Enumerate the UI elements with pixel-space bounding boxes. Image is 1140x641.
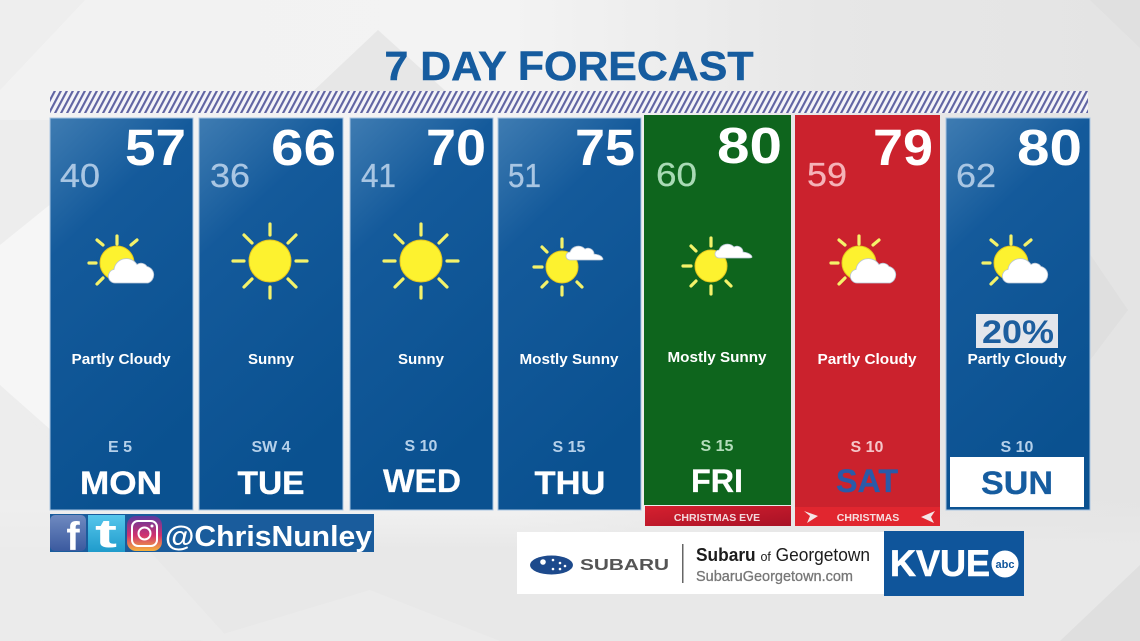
social handle bar — [50, 512, 374, 559]
high temperature Wednesday: 70 — [426, 119, 486, 176]
wind Thursday: S 15 — [553, 439, 586, 456]
high temperature Sunday: 80 — [1017, 119, 1082, 176]
wind Sunday: S 10 — [1001, 439, 1034, 456]
wind Monday: E 5 — [108, 439, 132, 456]
panel: Wednesday — [350, 118, 493, 510]
low temperature Sunday: 62 — [956, 157, 996, 194]
panel: Friday — [644, 115, 791, 526]
panel: Monday — [50, 118, 193, 510]
dealer name: Subaru of Georgetown — [696, 545, 870, 565]
icon: facebook: f — [66, 515, 80, 559]
day Thursday: THU — [534, 465, 606, 501]
KVUE logo — [884, 531, 1024, 596]
precipitation chance: 20% — [982, 314, 1054, 350]
condition Thursday: Mostly Sunny — [520, 352, 618, 368]
day label Sunday — [950, 457, 1084, 507]
high temperature Friday: 80 — [717, 117, 782, 174]
hatched band — [50, 91, 1088, 113]
low temperature Monday: 40 — [60, 157, 100, 194]
KVUE logo: KVUE — [890, 543, 990, 584]
sponsor panel — [517, 532, 885, 594]
banner: Christmas Eve — [645, 506, 791, 526]
icon: Subaru logo — [530, 556, 573, 574]
wind Saturday: S 10 — [851, 439, 884, 456]
icon: right ribbon — [921, 511, 935, 523]
day Saturday: SAT — [836, 463, 898, 499]
high temperature Thursday: 75 — [575, 119, 635, 176]
day Friday: FRI — [691, 463, 743, 499]
wind Tuesday: SW 4 — [251, 439, 291, 456]
icon: twitter — [88, 512, 125, 556]
icon: mostly sunny Friday — [683, 238, 752, 294]
low temperature Friday: 60 — [656, 156, 697, 193]
handle text: @ChrisNunley — [165, 521, 372, 553]
condition Friday: Mostly Sunny — [668, 350, 766, 366]
condition Tuesday: Sunny — [248, 352, 294, 368]
Subaru wordmark: SUBARU — [580, 557, 669, 574]
icon: partly cloudy Sunday — [983, 236, 1048, 284]
divider in sponsor panel — [682, 544, 684, 583]
dealer website: SubaruGeorgetown.com — [696, 569, 853, 585]
banner: Christmas Eve: CHRISTMAS EVE — [674, 512, 760, 524]
panel: Thursday — [498, 118, 641, 510]
icon: sun Wednesday — [384, 224, 458, 298]
panel: Saturday — [795, 115, 940, 526]
panel: Tuesday — [199, 118, 343, 510]
icon: abc circle: abc — [996, 559, 1014, 571]
day Tuesday: TUE — [238, 465, 304, 501]
banner: Christmas — [795, 507, 940, 526]
icon: mostly sunny Thursday — [534, 239, 603, 295]
day Wednesday: WED — [383, 463, 461, 499]
condition Monday: Partly Cloudy — [72, 352, 170, 368]
title: 7 DAY FORECAST — [384, 43, 754, 89]
icon: instagram — [127, 516, 162, 551]
condition Saturday: Partly Cloudy — [818, 352, 916, 368]
high temperature Monday: 57 — [125, 119, 186, 176]
banner: Christmas: CHRISTMAS — [837, 512, 899, 524]
icon: left ribbon — [804, 511, 818, 523]
day Monday: MON — [80, 465, 162, 501]
icon: facebook — [50, 515, 86, 559]
high temperature Tuesday: 66 — [271, 119, 336, 176]
day label Sunday: SUN — [981, 465, 1053, 501]
condition Wednesday: Sunny — [398, 352, 444, 368]
low temperature Tuesday: 36 — [210, 157, 250, 194]
icon: partly cloudy Saturday — [831, 236, 896, 284]
wind Friday: S 15 — [701, 438, 734, 455]
icon: twitter: t — [95, 512, 117, 556]
icon: partly cloudy Monday — [89, 236, 154, 284]
low temperature Saturday: 59 — [807, 156, 847, 193]
low temperature Wednesday: 41 — [361, 157, 396, 194]
icon: sun Tuesday — [233, 224, 307, 298]
condition Sunday: Partly Cloudy — [968, 352, 1066, 368]
low temperature Thursday: 51 — [508, 157, 541, 194]
wind Wednesday: S 10 — [405, 438, 438, 455]
panel: Sunday — [946, 118, 1090, 510]
high temperature Saturday: 79 — [873, 119, 933, 176]
